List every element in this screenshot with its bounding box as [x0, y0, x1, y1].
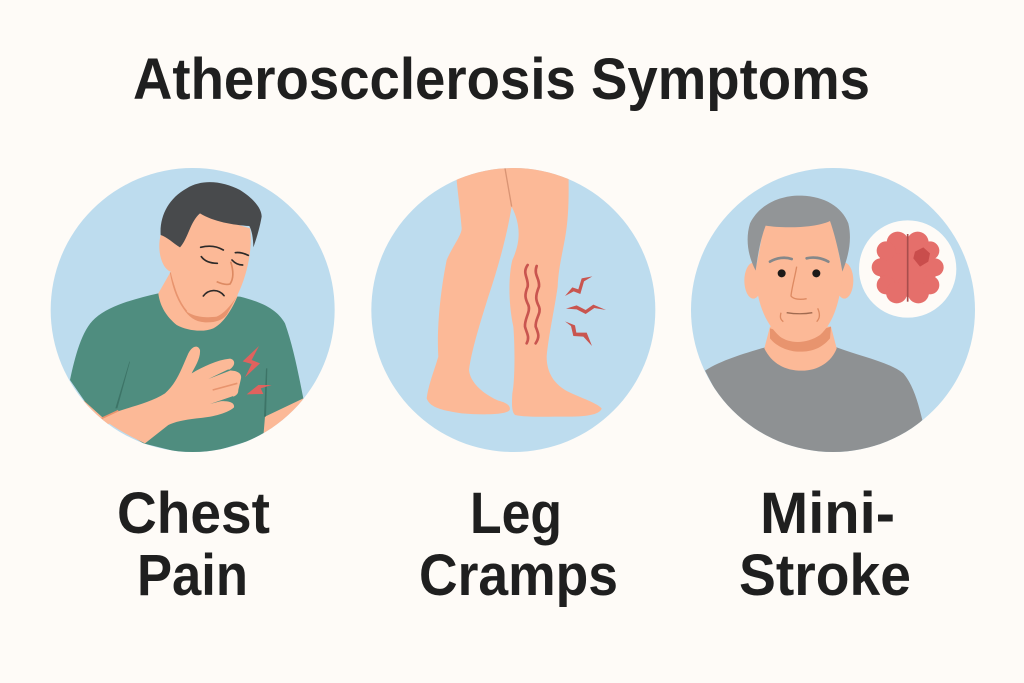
hair	[161, 182, 262, 247]
title: Atheroscclerosis Symptoms	[133, 47, 870, 112]
label: leg cramps: Cramps	[419, 543, 618, 608]
label: mini-stroke	[739, 481, 911, 608]
label: mini-stroke: Stroke	[739, 543, 911, 608]
icon: pain marks	[565, 276, 606, 346]
lower arms	[83, 398, 304, 433]
label: leg cramps	[419, 481, 618, 608]
label: mini-stroke: Mini-	[760, 481, 895, 546]
label: chest pain: Chest	[117, 481, 270, 546]
shirt	[70, 293, 303, 457]
label: chest pain: Pain	[137, 543, 248, 608]
eyebrows	[770, 258, 828, 262]
label: leg cramps: Leg	[470, 481, 562, 546]
eyes, nose, mouth	[201, 246, 248, 296]
panel: chest pain illustration	[51, 168, 335, 457]
panel: leg cramps illustration	[371, 167, 655, 452]
arm and hand	[102, 347, 241, 443]
legs	[427, 167, 512, 414]
cramp waves	[525, 265, 540, 343]
nose, mouth and creases	[780, 267, 819, 322]
eyes	[778, 269, 786, 277]
label: chest pain	[117, 481, 270, 608]
head	[756, 217, 842, 342]
icon: brain bubble	[859, 220, 956, 318]
shirt	[705, 347, 922, 460]
ears	[744, 263, 758, 299]
hair	[748, 196, 850, 272]
icon: pain bolts	[243, 346, 272, 394]
neck	[764, 327, 837, 371]
neck and face	[158, 272, 238, 331]
panel: mini-stroke illustration	[691, 168, 975, 460]
